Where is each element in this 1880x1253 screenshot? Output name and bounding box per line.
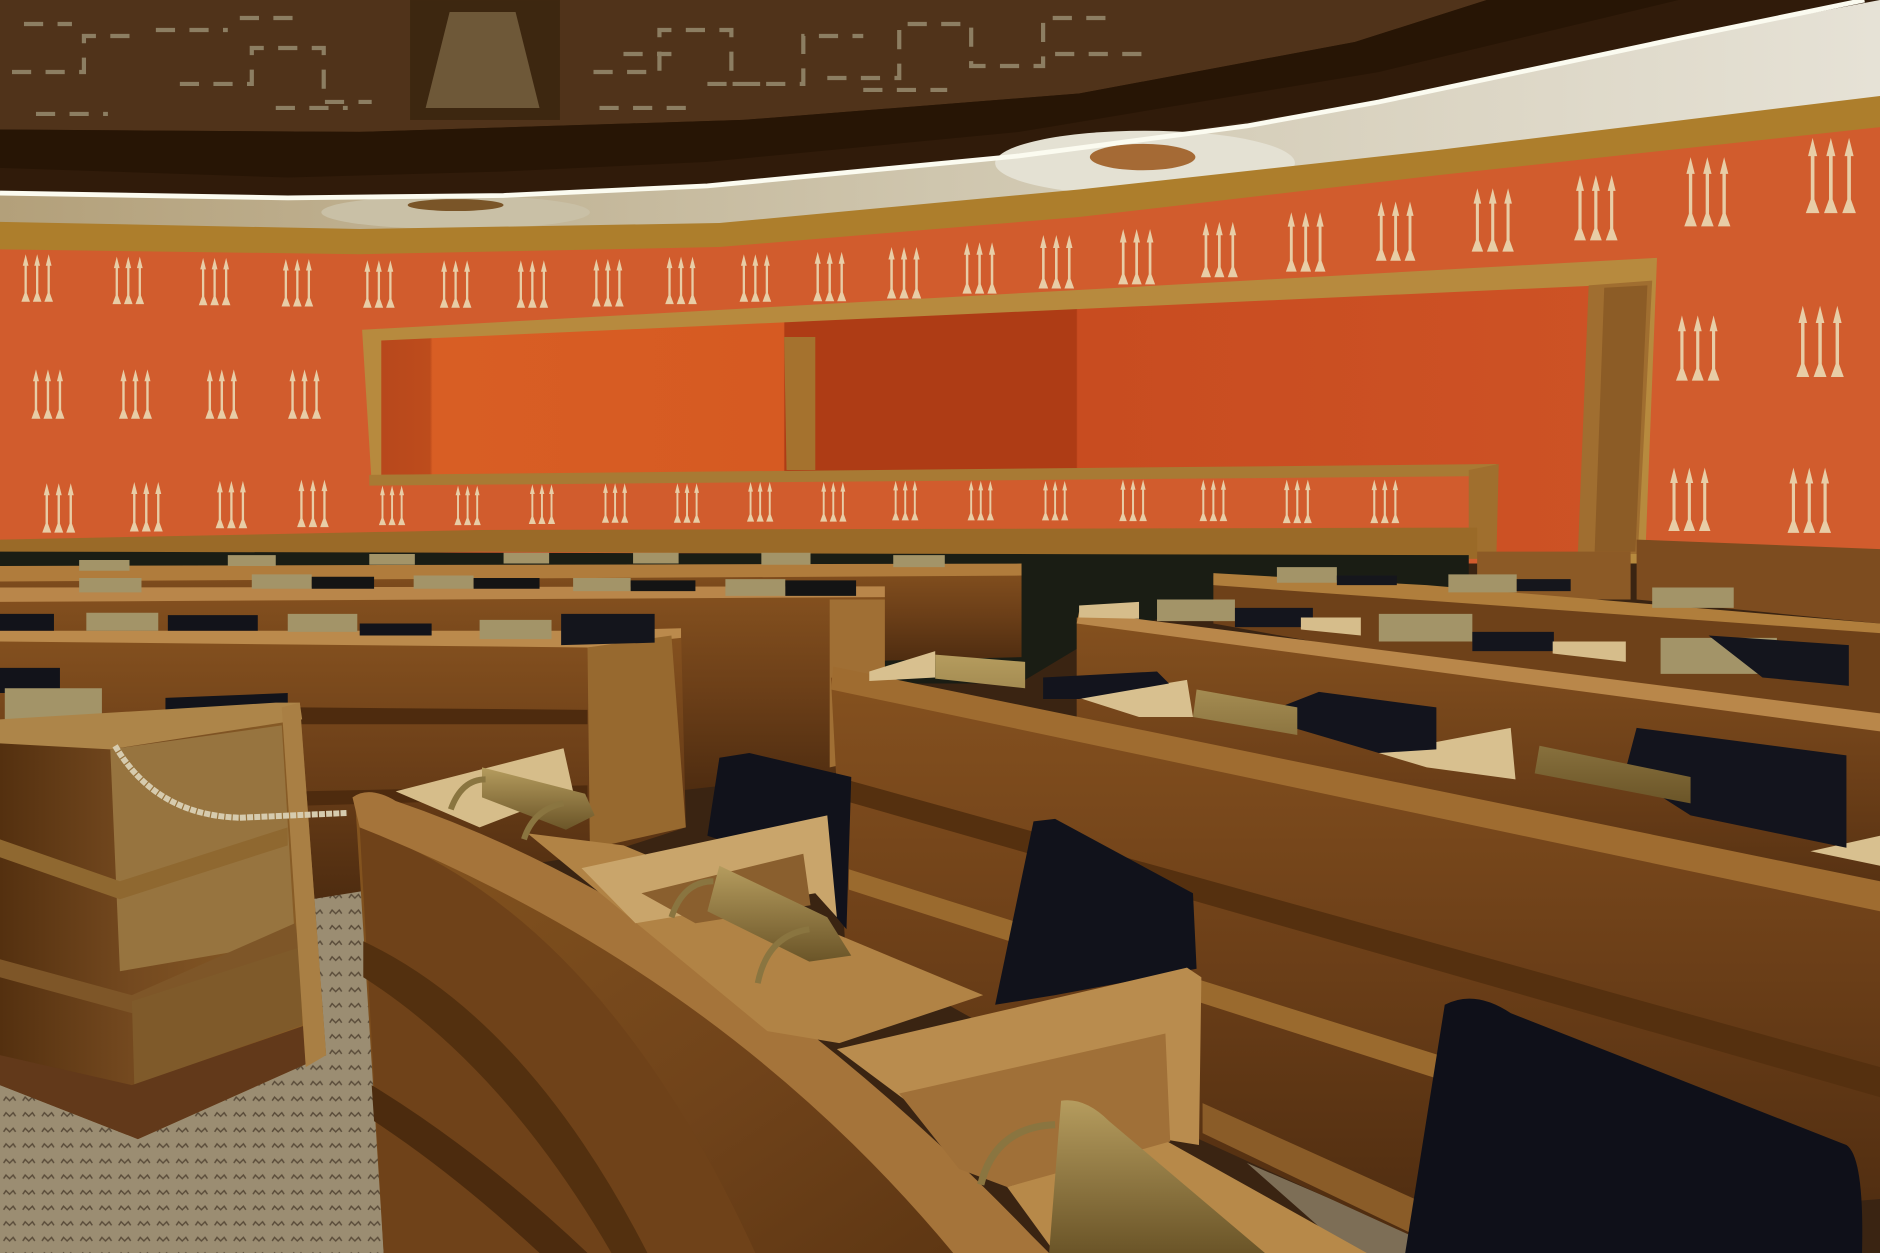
row: third left xyxy=(0,628,686,899)
chair: large black right foreground xyxy=(1405,999,1862,1253)
ceiling disc left xyxy=(321,195,590,229)
floor carpet xyxy=(0,839,384,1253)
ceiling: carved wood dome xyxy=(0,0,1880,198)
chair: centre back xyxy=(707,753,851,929)
left pedestal xyxy=(0,703,348,1139)
row: far left xyxy=(0,564,1022,662)
gold moulding xyxy=(0,96,1880,254)
relief panel xyxy=(410,0,560,120)
door xyxy=(1578,281,1652,554)
desk divider: upper xyxy=(582,815,837,923)
chair: centre front xyxy=(995,819,1197,1005)
rope xyxy=(115,746,348,818)
chairs xyxy=(1043,671,1846,848)
lamp: upper xyxy=(451,767,595,839)
row: front right xyxy=(831,651,1880,1237)
desk divider: lower xyxy=(837,968,1201,1187)
row: back right xyxy=(1213,567,1880,743)
lamps xyxy=(935,655,1691,803)
row: second left xyxy=(0,586,885,791)
wall arrows xyxy=(21,138,1856,533)
row: middle right xyxy=(1077,600,1880,935)
desk surfaces xyxy=(528,833,1367,1253)
lamp: foreground xyxy=(981,1100,1265,1253)
carpet wedge under front right row xyxy=(1247,1163,1415,1253)
desk dividers xyxy=(869,651,1880,866)
doorway post xyxy=(784,337,815,470)
wall opening xyxy=(362,258,1657,564)
curved front desk xyxy=(352,748,1049,1253)
left row chairs and lamps xyxy=(0,553,945,719)
lamp: middle xyxy=(671,866,851,983)
dark back bench xyxy=(0,552,1469,683)
ceiling cove xyxy=(0,0,1880,231)
right wall panelling xyxy=(1477,540,1880,624)
ceiling disc right xyxy=(995,131,1295,195)
back wall rail xyxy=(0,528,1477,561)
rail post xyxy=(1469,464,1499,559)
orange wall xyxy=(0,124,1880,564)
rail xyxy=(369,464,1496,486)
light strip xyxy=(0,0,1864,198)
